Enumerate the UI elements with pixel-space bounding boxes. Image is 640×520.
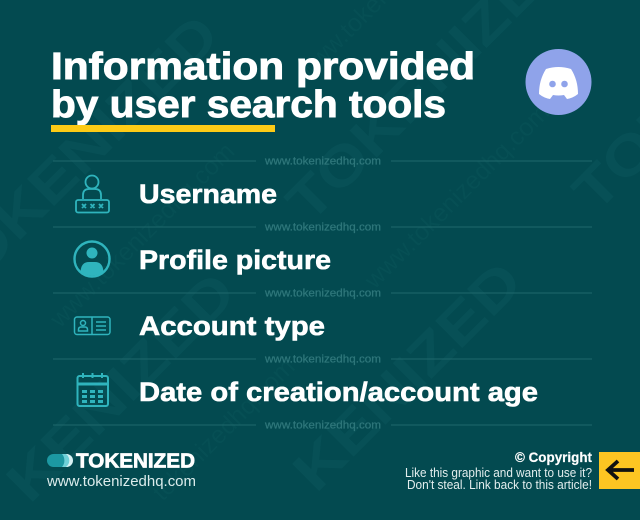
icon: profile picture — [74, 242, 110, 276]
row dividers with site address — [53, 156, 592, 432]
label: username: Username — [139, 179, 277, 209]
label: date of creation: Date of creation/account age — [139, 377, 538, 407]
row dividers with site address: www.tokenizedhq.com — [264, 354, 381, 366]
icon: discord logo — [526, 49, 592, 115]
text: KENIZED — [280, 249, 534, 503]
label: profile picture: Profile picture — [139, 245, 331, 275]
title: by user search tools — [51, 84, 446, 126]
icon: account type — [74, 317, 110, 334]
copyright notice — [405, 450, 592, 492]
title: Information provided — [51, 46, 475, 88]
icon: username — [76, 176, 109, 212]
copyright notice: © Copyright — [515, 450, 592, 465]
title — [51, 46, 475, 126]
icon: calendar — [78, 373, 108, 406]
label: account type: Account type — [139, 311, 325, 341]
copyright notice: Don't steal. Link back to this article! — [407, 478, 592, 492]
arrow button — [599, 452, 640, 489]
text: www.tokenizedhq.com — [44, 137, 240, 334]
row dividers with site address: www.tokenizedhq.com — [264, 156, 381, 168]
copyright notice: Like this graphic and want to use it? — [405, 466, 592, 480]
text: www.tokenizedhq.com — [359, 98, 555, 295]
row dividers with site address: www.tokenizedhq.com — [264, 420, 381, 432]
icon: brand mark — [47, 454, 73, 467]
title underline — [51, 125, 275, 132]
row dividers with site address: www.tokenizedhq.com — [264, 222, 381, 234]
website address: www.tokenizedhq.com — [46, 473, 196, 490]
text: KENIZED — [0, 260, 247, 513]
row dividers with site address: www.tokenizedhq.com — [264, 288, 381, 300]
brand logo: TOKENIZED — [76, 450, 195, 472]
text: tokenizedhq.com — [147, 353, 301, 506]
